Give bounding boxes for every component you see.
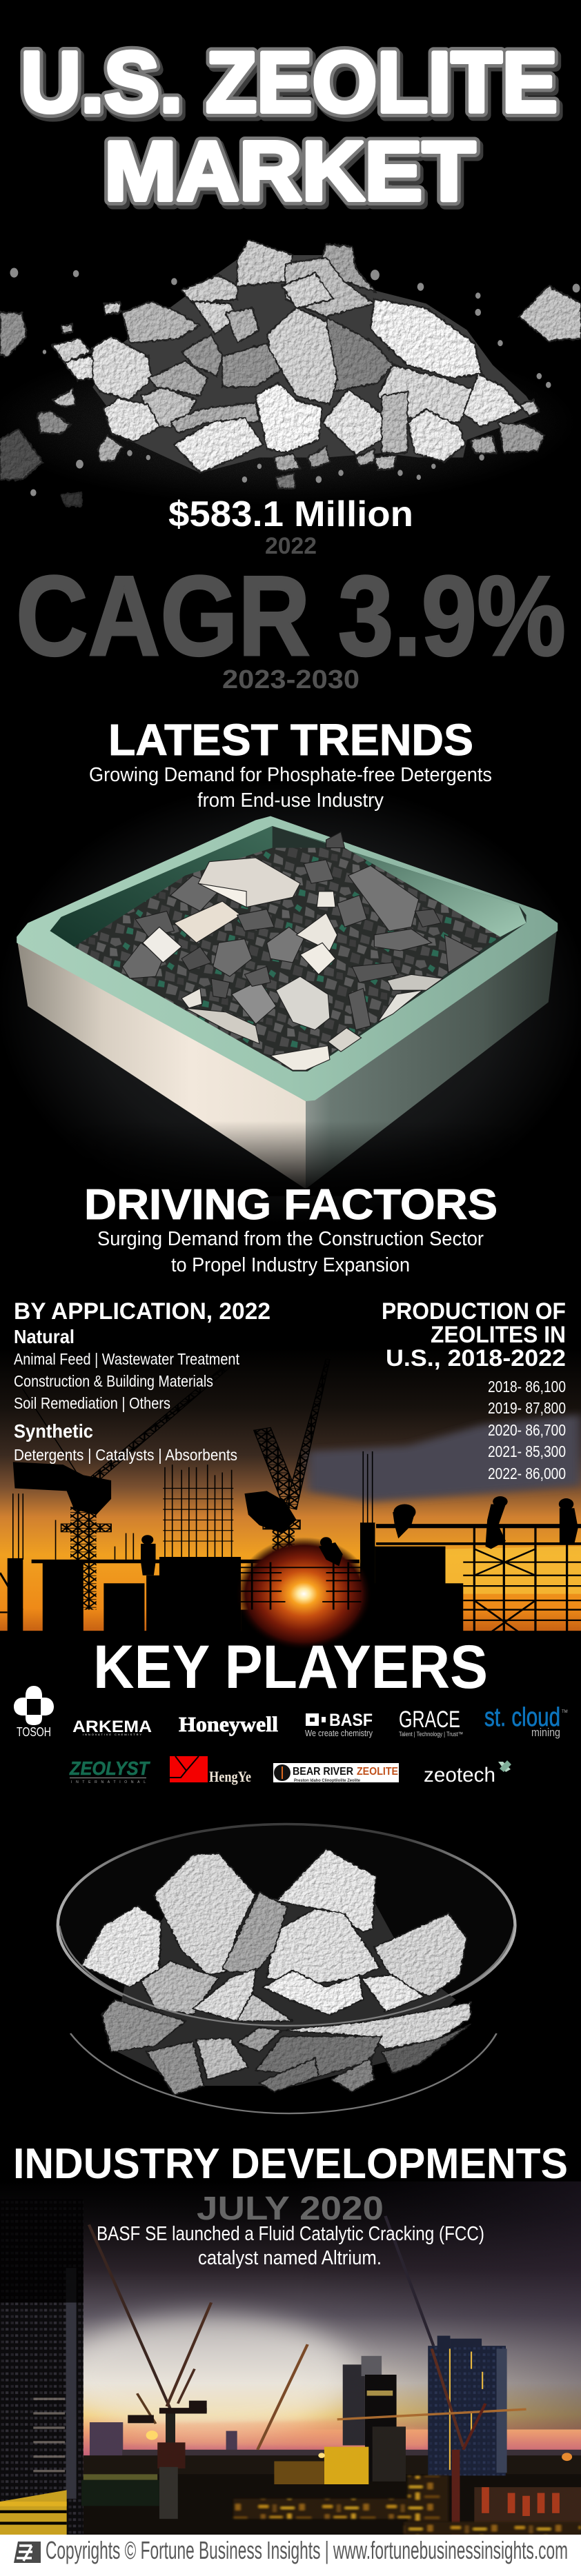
trend description: Growing Demand for Phosphate-free Detergents bbox=[89, 764, 492, 786]
trend description: from End-use Industry bbox=[197, 789, 384, 812]
logo: Zeolyst: INTERNATIONAL bbox=[71, 1780, 146, 1784]
natural applications: Animal Feed | Wastewater Treatment bbox=[14, 1350, 240, 1368]
natural applications: Soil Remediation | Others bbox=[14, 1394, 170, 1412]
logo: St. Cloud Mining: mining bbox=[531, 1726, 560, 1739]
image: construction site at sunset bbox=[0, 1349, 581, 1651]
title: MARKET bbox=[104, 124, 475, 218]
logo: Bear River Zeolite: ZEOLITE bbox=[357, 1766, 398, 1778]
image: tray of zeolite stones bbox=[0, 781, 581, 1224]
logo: Zeolyst: ZEOLYST bbox=[69, 1758, 151, 1779]
heading: latest trends: LATEST TRENDS bbox=[108, 715, 473, 765]
title bbox=[21, 35, 560, 221]
cranes bbox=[89, 2216, 526, 2535]
logo: Bear River Zeolite: Preston Idaho Clinoptilolite Zeolite bbox=[294, 1779, 361, 1783]
subheading: natural: Natural bbox=[14, 1326, 75, 1347]
logo: St. Cloud Mining: TM bbox=[562, 1710, 568, 1714]
heading: production: U.S., 2018-2022 bbox=[386, 1345, 566, 1371]
title: MARKET bbox=[104, 124, 475, 218]
development description: BASF SE launched a Fluid Catalytic Cracking (FCC) bbox=[97, 2223, 484, 2245]
development description: catalyst named Altrium. bbox=[198, 2247, 382, 2269]
title: U.S. ZEOLITE bbox=[21, 35, 558, 130]
rebar columns bbox=[13, 1451, 373, 1560]
panel: company logos bbox=[14, 1686, 568, 1787]
synthetic applications: Detergents | Catalysts | Absorbents bbox=[14, 1446, 237, 1464]
footer bar bbox=[0, 2535, 581, 2576]
production figures by year: 2018- 86,100 bbox=[488, 1378, 566, 1396]
logo: Grace: Talent | Technology | Trust™ bbox=[399, 1731, 463, 1738]
image: zeolite rock pile bbox=[0, 240, 581, 506]
logo: BASF bbox=[305, 1711, 373, 1738]
driving factors description: to Propel Industry Expansion bbox=[171, 1254, 410, 1276]
logo: Arkema: INNOVATIVE CHEMISTRY bbox=[83, 1733, 141, 1736]
logo: Tosoh: TOSOH bbox=[17, 1725, 51, 1739]
natural applications bbox=[14, 1350, 240, 1412]
forecast period: 2023-2030 bbox=[222, 665, 360, 694]
left tower bbox=[0, 2199, 83, 2535]
central crane bbox=[244, 1359, 330, 1576]
image: city construction at dusk bbox=[0, 2182, 581, 2535]
image: zeolite in petri dish bbox=[58, 1824, 515, 2113]
production figures by year: 2022- 86,000 bbox=[488, 1465, 566, 1482]
logo: Honeywell: Honeywell bbox=[179, 1712, 278, 1736]
production figures by year: 2020- 86,700 bbox=[488, 1421, 566, 1439]
logo: Arkema: ARKEMA bbox=[72, 1718, 152, 1736]
scaffolding lines bbox=[0, 1528, 581, 1644]
logo: BASF: We create chemistry bbox=[305, 1728, 373, 1738]
left crane bbox=[13, 1365, 230, 1610]
workers on site bbox=[141, 1496, 578, 1576]
heading: production: PRODUCTION OF bbox=[382, 1298, 566, 1325]
heading: key players: KEY PLAYERS bbox=[93, 1632, 488, 1701]
heading: by application: BY APPLICATION, 2022 bbox=[14, 1298, 270, 1325]
development description bbox=[97, 2223, 484, 2269]
logo: Grace: GRACE bbox=[399, 1707, 460, 1733]
distant buildings bbox=[83, 2422, 581, 2535]
logo: St. Cloud Mining: st. cloud bbox=[484, 1703, 560, 1732]
production figures by year bbox=[488, 1378, 566, 1482]
right towers bbox=[343, 2336, 507, 2482]
construction lights bbox=[0, 2431, 581, 2535]
heading: production: ZEOLITES IN bbox=[431, 1322, 566, 1348]
logo: Bear River Zeolite bbox=[273, 1763, 399, 1783]
heading: production bbox=[382, 1298, 566, 1371]
natural applications: Construction & Building Materials bbox=[14, 1372, 213, 1390]
logo: Bear River Zeolite: BEAR RIVER bbox=[293, 1766, 353, 1778]
year 2022: 2022 bbox=[265, 533, 317, 559]
logo: BASF: BASF bbox=[329, 1711, 373, 1730]
title: U.S. ZEOLITE bbox=[23, 39, 560, 134]
panel: by application bbox=[14, 1298, 270, 1464]
production figures by year: 2019- 87,800 bbox=[488, 1399, 566, 1417]
concrete blocks and platforms bbox=[0, 1522, 581, 1647]
logo: HengYe bbox=[170, 1756, 251, 1785]
trend description bbox=[89, 764, 492, 812]
logo: HengYe: HengYe bbox=[209, 1768, 251, 1785]
logo: Zeotech: zeotech bbox=[424, 1764, 495, 1787]
date: July 2020: JULY 2020 bbox=[197, 2191, 384, 2227]
panel: production of zeolites bbox=[382, 1298, 566, 1482]
title: U.S. ZEOLITE bbox=[21, 35, 558, 130]
logo: Tosoh bbox=[14, 1686, 54, 1739]
driving factors description: Surging Demand from the Construction Sector bbox=[97, 1228, 484, 1250]
title: MARKET bbox=[107, 128, 478, 221]
driving factors description bbox=[97, 1228, 484, 1276]
heading: industry developments: INDUSTRY DEVELOPMENTS bbox=[13, 2140, 568, 2188]
heading: driving factors: DRIVING FACTORS bbox=[84, 1181, 498, 1229]
icon: Fortune Business Insights logo bbox=[14, 2542, 41, 2563]
subheading: synthetic: Synthetic bbox=[14, 1420, 93, 1442]
logo: Grace bbox=[399, 1707, 463, 1738]
market size value: $583.1 Million bbox=[168, 494, 413, 534]
sun glow bbox=[235, 1537, 373, 1651]
production figures by year: 2021- 85,300 bbox=[488, 1442, 566, 1460]
